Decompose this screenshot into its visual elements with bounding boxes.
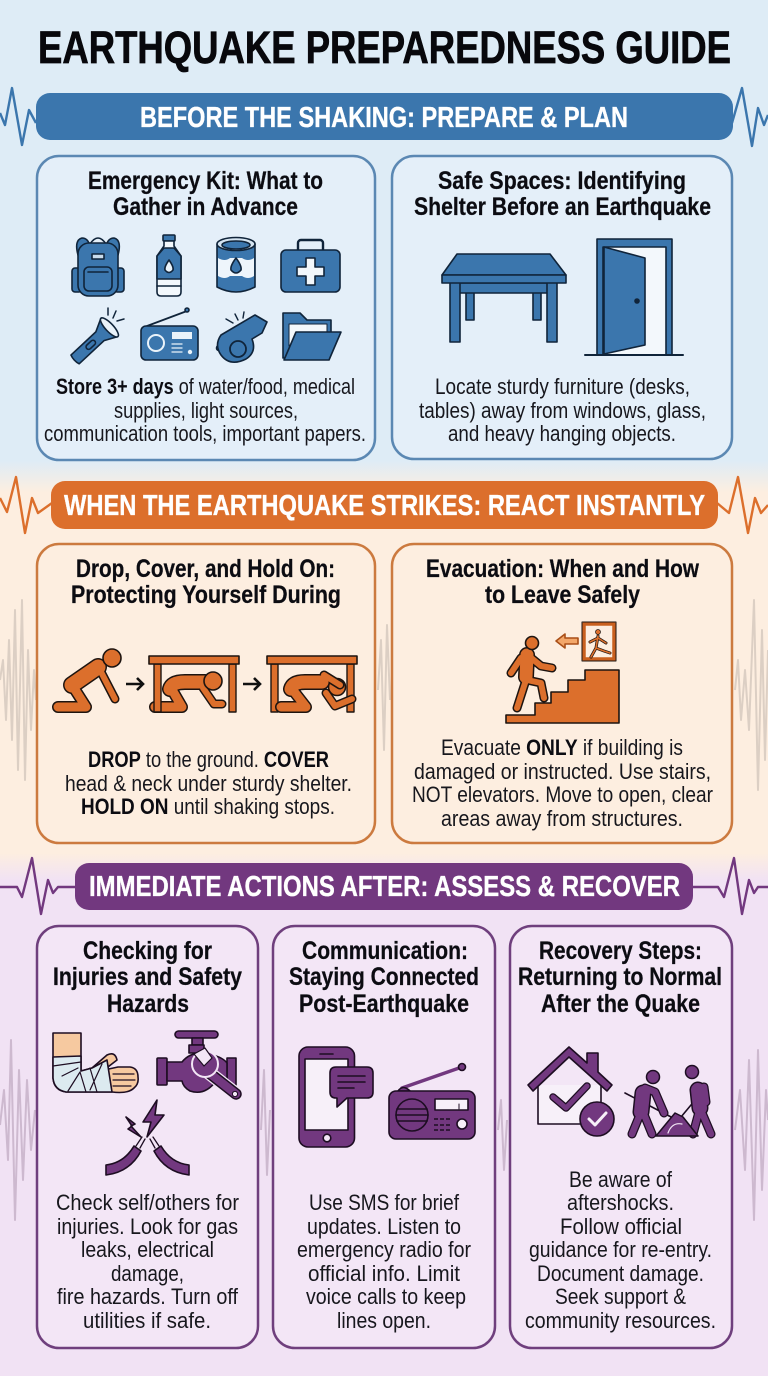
body text: drop cover hold on: DROP to the ground. COVER xyxy=(88,747,329,772)
seismic line: purple right xyxy=(692,858,768,914)
heading: checking for injuries: Checking for xyxy=(83,937,212,965)
heading: emergency kit: Emergency Kit: What to xyxy=(88,167,323,195)
icon: drop figure xyxy=(58,649,121,707)
body text: checking for injuries: damage, xyxy=(111,1261,184,1286)
body text: recovery steps: Document damage. xyxy=(537,1261,704,1286)
heading: safe spaces xyxy=(414,167,711,221)
panel: drop cover hold on xyxy=(37,544,375,843)
panel: evacuation xyxy=(392,544,732,843)
panel: recovery steps xyxy=(510,926,732,1348)
body text: checking for injuries: utilities if safe. xyxy=(83,1308,211,1333)
body text: checking for injuries: leaks, electrical xyxy=(81,1237,214,1262)
heading: checking for injuries xyxy=(53,937,242,1018)
icon: flashlight xyxy=(66,308,124,369)
heading: checking for injuries: Hazards xyxy=(107,990,189,1018)
heading: recovery steps: After the Quake xyxy=(541,990,700,1018)
body text: evacuation: NOT elevators. Move to open, clear xyxy=(412,782,713,807)
body text: checking for injuries: injuries. Look for gas xyxy=(57,1214,238,1239)
body text: drop cover hold on: HOLD ON until shaking stops. xyxy=(81,794,335,819)
arrow xyxy=(126,678,143,690)
body text: recovery steps: guidance for re-entry. xyxy=(529,1237,712,1262)
icon: phone with message xyxy=(299,1047,373,1147)
body text: safe spaces xyxy=(419,374,706,446)
icon: water bottle xyxy=(157,235,181,296)
arrow xyxy=(243,678,260,690)
body text: drop cover hold on: head & neck under sturdy shelter. xyxy=(65,771,352,796)
icon: first aid kit xyxy=(281,240,340,292)
body text: communication: voice calls to keep xyxy=(306,1284,466,1309)
body text: checking for injuries: Check self/others for xyxy=(56,1190,239,1215)
heading: recovery steps xyxy=(518,937,722,1018)
heading: emergency kit: Gather in Advance xyxy=(113,193,298,221)
body text: recovery steps: Follow official xyxy=(560,1214,682,1239)
body text: safe spaces: and heavy hanging objects. xyxy=(448,421,676,446)
body text: safe spaces: Locate sturdy furniture (desks, xyxy=(435,374,690,399)
body text: recovery steps: Be aware of xyxy=(569,1167,673,1192)
heading: emergency kit xyxy=(88,167,323,221)
heading: safe spaces: Shelter Before an Earthquake xyxy=(414,193,711,221)
icon: radio xyxy=(141,308,198,360)
icon: gas valve and wrench xyxy=(157,1031,238,1097)
heading: recovery steps: Recovery Steps: xyxy=(539,937,702,965)
body text: communication: emergency radio for xyxy=(297,1237,471,1262)
icon: emergency radio xyxy=(389,1064,475,1139)
heading: safe spaces: Safe Spaces: Identifying xyxy=(438,167,686,195)
icon: hold on figure under table xyxy=(267,656,357,712)
body text: checking for injuries: fire hazards. Turn off xyxy=(57,1284,239,1309)
seismic line: blue left xyxy=(0,88,36,145)
heading: communication: Post-Earthquake xyxy=(299,990,469,1018)
panel: emergency kit xyxy=(37,156,375,460)
heading: communication xyxy=(289,937,479,1018)
body text: recovery steps: community resources. xyxy=(525,1308,716,1333)
body text: communication: official info. Limit xyxy=(308,1261,460,1286)
icon: backpack xyxy=(72,238,124,296)
heading: drop cover hold on: Protecting Yourself During xyxy=(71,581,341,609)
heading: checking for injuries: Injuries and Safety xyxy=(53,963,242,991)
icon: sparking wires xyxy=(106,1100,189,1175)
icon: house with checkmark xyxy=(528,1047,614,1136)
icon: food can xyxy=(217,238,255,292)
section banner: before the shaking xyxy=(36,93,733,140)
icon: bandaged arm xyxy=(53,1033,138,1092)
panel: safe spaces xyxy=(392,156,732,459)
body text: evacuation xyxy=(412,735,713,831)
seismic line: purple left xyxy=(0,858,76,914)
body text: communication: Use SMS for brief xyxy=(309,1190,460,1215)
icon: whistle xyxy=(216,312,267,362)
icon: folder xyxy=(283,313,341,360)
heading: communication: Communication: xyxy=(302,937,468,965)
body text: recovery steps xyxy=(525,1167,716,1333)
heading: evacuation: Evacuation: When and How xyxy=(426,555,699,583)
panel: communication xyxy=(273,926,495,1348)
body text: drop cover hold on xyxy=(65,747,352,819)
body text: emergency kit: Store 3+ days of water/food, medical xyxy=(56,374,355,399)
panel: checking for injuries xyxy=(37,926,258,1348)
seismic line: orange right xyxy=(717,477,768,533)
section banner: before the shaking: BEFORE THE SHAKING: PREPARE & PLAN xyxy=(140,102,628,134)
seismic line: orange left xyxy=(0,477,52,533)
body text: evacuation: Evacuate ONLY if building is xyxy=(441,735,683,760)
icon: door xyxy=(585,239,683,355)
heading: recovery steps: Returning to Normal xyxy=(518,963,722,991)
icon: table xyxy=(442,254,566,342)
heading: drop cover hold on xyxy=(71,555,341,609)
body text: evacuation: areas away from structures. xyxy=(441,806,683,831)
heading: drop cover hold on: Drop, Cover, and Hold On: xyxy=(76,555,335,583)
body text: evacuation: damaged or instructed. Use stairs, xyxy=(414,759,711,784)
body text: recovery steps: aftershocks. xyxy=(567,1190,674,1215)
body text: communication: updates. Listen to xyxy=(307,1214,461,1239)
body text: recovery steps: Seek support & xyxy=(555,1284,686,1309)
body text: communication xyxy=(297,1190,471,1333)
section banner: immediate actions after xyxy=(75,863,693,910)
seismic line: blue right xyxy=(732,88,768,146)
body text: emergency kit xyxy=(44,374,366,446)
body text: checking for injuries xyxy=(56,1190,239,1333)
body text: communication: lines open. xyxy=(337,1308,431,1333)
section banner: when the earthquake strikes xyxy=(51,481,718,529)
heading: evacuation: to Leave Safely xyxy=(485,581,640,609)
icon: workers clearing rubble xyxy=(625,1066,711,1136)
heading: communication: Staying Connected xyxy=(289,963,479,991)
icon: person climbing stairs to exit xyxy=(506,622,619,723)
icon: cover figure under table xyxy=(149,656,239,712)
body text: emergency kit: communication tools, important papers. xyxy=(44,421,366,446)
body text: safe spaces: tables) away from windows, glass, xyxy=(419,398,706,423)
heading: evacuation xyxy=(426,555,699,609)
body text: emergency kit: supplies, light sources, xyxy=(114,398,298,423)
faint seismic background traces xyxy=(0,600,768,1220)
